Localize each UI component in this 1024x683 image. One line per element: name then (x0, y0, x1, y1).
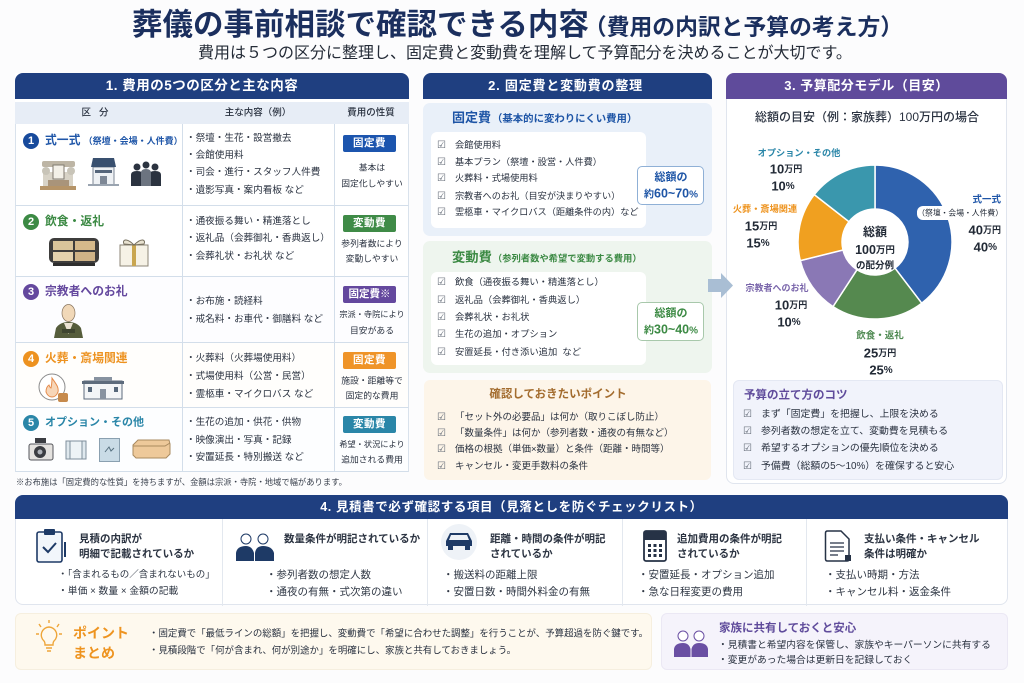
check points list: 価格の根拠（単価×数量）と条件（距離・時間等） (455, 444, 670, 455)
note: 施設・距離等で (341, 376, 403, 386)
label: ceremony set (917, 194, 1003, 254)
badge: 固定費※ (348, 288, 390, 300)
label: religious (745, 282, 809, 330)
variable cost list: 会葬礼状・お礼状 (455, 312, 529, 322)
fixed cost list: 基本プラン（祭壇・設営・人件費） (455, 157, 602, 167)
row 3: religious: ・戒名料・お車代・御膳料 など (186, 314, 323, 325)
variable cost list: ☑ (437, 277, 446, 288)
fixed cost heading: 固定費（基本的に変わりにくい費用） (452, 110, 637, 125)
heading: 数量条件が明記されているか (284, 533, 420, 545)
fixed cost list: ☑ (437, 173, 446, 184)
tips heading: 予算の立て方のコツ (744, 389, 848, 401)
badge (343, 215, 396, 232)
checklist item 3: されているか (490, 548, 553, 560)
row 2: food (15, 206, 409, 277)
label: options: オプション・その他 (758, 147, 840, 158)
chart subtitle: 総額の目安（例：家族葬）100万円の場合 (755, 110, 979, 124)
label: food: 飲食・返礼 (856, 330, 904, 342)
panel: budget model (726, 73, 1007, 484)
variable cost list: ☑ (437, 347, 446, 358)
summary text: ・固定費で「最低ラインの総額」を把握し、変動費で「希望に合わせた調整」を行うことが、予算超過を防ぐ鍵です。 (149, 628, 648, 639)
label: options (758, 147, 840, 194)
list: ・お布施・読経料 (186, 296, 263, 307)
variable cost list (431, 272, 646, 365)
icon: clipboard (36, 529, 66, 563)
row 2: food: 2 (28, 216, 34, 228)
variable cost list: 安置延長・付き添い追加 など (455, 347, 581, 357)
fixed share callout (637, 166, 704, 205)
row 5: options: 5 (28, 417, 34, 429)
title: 葬儀の事前相談で確認できる内容（費用の内訳と予算の考え方） (132, 8, 903, 42)
bullets: ・搬送料の距離上限 (443, 569, 538, 581)
row 1: ceremony set: 固定化しやすい (341, 179, 403, 189)
label: religious: 10万円 (775, 298, 807, 312)
heading: 支払い条件・キャンセル (864, 533, 980, 545)
checklist item 5: 条件は明確か (864, 548, 927, 560)
heading: 見積の内訳が (79, 533, 142, 545)
heading: 追加費用の条件が明記 (677, 533, 782, 545)
fixed cost list: ☑ (437, 157, 446, 168)
fixed cost list: ☑ (437, 207, 446, 218)
row 5: options (15, 408, 409, 472)
icon: light bulb (36, 620, 62, 652)
tips box (733, 380, 1003, 480)
label: options: 10% (771, 178, 795, 194)
badge: 変動費 (353, 217, 386, 229)
row 4: cremation: 火葬・斎場関連 (45, 351, 128, 365)
row 1: ceremony set: ・遺影写真・案内看板 など (186, 185, 304, 196)
check points box (424, 380, 711, 480)
checklist item 1: 明細で記載されているか (79, 548, 194, 560)
icon: calculator (643, 530, 667, 562)
label: cremation (733, 203, 797, 250)
variable cost box (423, 241, 712, 373)
summary heading: ポイント (73, 625, 129, 641)
tips list: まず「固定費」を把握し、上限を決める (761, 409, 939, 420)
donut centre label: の配分例 (856, 260, 894, 272)
icon: hall (88, 158, 119, 186)
row 5: options: オプション・その他 (45, 416, 144, 428)
row 2: food: ・会葬礼状・お礼状 など (186, 251, 294, 262)
check points list: ☑ (437, 444, 446, 455)
badge: 固定費 (353, 137, 386, 149)
table header row: 区 分 (82, 107, 108, 118)
panel: family sharing: ・変更があった場合は更新日を記録しておく (718, 655, 912, 666)
row 2: food: ・返礼品（会葬御礼・香典返し） (186, 233, 330, 244)
heading: 距離・時間の条件が明記 (490, 533, 606, 545)
icon: staff (131, 162, 161, 186)
table header row: 主な内容（例） (225, 107, 291, 118)
fixed cost list: 霊柩車・マイクロバス（距離条件の内）など (455, 207, 639, 217)
note: 宗派・寺院により (339, 310, 405, 319)
label: food: 25% (869, 362, 893, 378)
row 5: options: ・安置延長・特別搬送 など (186, 452, 304, 463)
panel: summary: ・見積段階で「何が含まれ、何が別途か」を明確にし、家族と共有しておきましょう。 (149, 645, 516, 656)
row 5: options: 追加される費用 (341, 455, 403, 465)
label: food: 25万円 (864, 346, 896, 360)
panel heading 1: 1. 費用の5つの区分と主な内容 (106, 78, 298, 93)
label: cremation: 15万円 (745, 218, 777, 234)
panel: summary: まとめ (73, 645, 115, 661)
row 3: religious: 宗教者へのお礼 (45, 284, 128, 298)
panel: estimate checklist (15, 495, 1008, 605)
donut centre label (855, 224, 895, 272)
row 1: ceremony set (15, 124, 409, 206)
variable cost heading: 変動費（参列者数や希望で変動する費用） (452, 249, 642, 264)
checklist item 3: ・安置日数・時間外料金の有無 (443, 586, 590, 598)
bullets: ・支払い時期・方法 (825, 569, 920, 581)
tips list: ☑ (743, 426, 752, 437)
list: ・祭壇・生花・設営撤去 (186, 133, 292, 144)
label: ceremony set: 40万円 (969, 222, 1001, 238)
checklist item 2 (223, 519, 428, 606)
checklist item 4: ・急な日程変更の費用 (638, 586, 743, 598)
checklist item 3 (428, 519, 623, 606)
arrow (708, 273, 733, 298)
checklist item 5 (824, 530, 980, 598)
tips list: ☑ (743, 443, 752, 454)
check points list: ☑ (437, 412, 446, 423)
variable share callout: 約30~40% (644, 322, 698, 336)
check points list: 「数量条件」は何か（参列者数・通夜の有無など） (455, 428, 674, 439)
badge (343, 135, 396, 152)
variable share callout: 総額の (654, 308, 688, 320)
badge: 固定費 (353, 354, 386, 366)
fixed share callout: 総額の (654, 172, 688, 184)
check points list (437, 412, 674, 472)
checklist item 1 (16, 519, 223, 606)
row 2: food: 変動しやすい (346, 254, 398, 264)
check points heading: 確認しておきたいポイント (489, 388, 627, 400)
variable cost list: 返礼品（会葬御礼・香典返し） (455, 295, 585, 305)
tips list: ☑ (743, 409, 752, 420)
badge (343, 286, 396, 303)
panel heading 2: 2. 固定費と変動費の整理 (488, 78, 643, 93)
icon: monk (54, 304, 83, 338)
panel: fixed and variable (423, 73, 712, 480)
tips list: 参列者数の想定を立て、変動費を見積もる (761, 426, 948, 437)
tips list: 予備費（総額の5～10%）を確保すると安心 (761, 461, 954, 472)
row 5: options: ・映像演出・写真・記録 (186, 435, 292, 446)
variable cost list: ☑ (437, 329, 446, 340)
fixed cost list: 火葬料・式場使用料 (455, 173, 538, 183)
footnote: ※お布施は「固定費的な性質」を持ちますが、金額は宗派・寺院・地域で幅があります。 (16, 477, 347, 487)
label: ceremony set: 40% (974, 240, 997, 254)
checklist item 2: ・通夜の有無・式次第の違い (266, 586, 402, 598)
panel heading 3 (726, 73, 1007, 99)
table header row: 費用の性質 (347, 107, 395, 118)
label: cremation: 15% (746, 236, 770, 250)
badge (343, 416, 396, 433)
row 1: ceremony set: 1 (28, 135, 34, 147)
tips list (743, 408, 954, 472)
panel: cost categories (15, 73, 409, 472)
row 4: cremation: ・式場使用料（公営・民営） (186, 371, 311, 382)
fixed cost list (431, 132, 646, 228)
icon: bento (49, 238, 99, 266)
bullets: ・「含まれるもの／含まれないもの」 (58, 569, 215, 580)
bullets: ・安置延長・オプション追加 (638, 569, 774, 581)
row 4: cremation: 4 (28, 353, 34, 365)
checklist item 4: されているか (677, 548, 740, 560)
fixed cost list: ☑ (437, 191, 446, 202)
badge (343, 352, 396, 369)
row 1: ceremony set: 式一式 （祭壇・会場・人件費） (45, 133, 183, 147)
panel heading 4 (15, 495, 1008, 519)
badge: 変動費 (353, 418, 386, 430)
row 1: ceremony set: ・司会・進行・スタッフ人件費 (186, 167, 320, 178)
label: ceremony set: 式一式 (972, 194, 1001, 206)
donut centre label: 100万円 (855, 243, 895, 257)
check points list: ☑ (437, 428, 446, 439)
row 3: religious: 目安がある (350, 326, 394, 336)
icon: flame (38, 374, 68, 402)
bullets: ・参列者数の想定人数 (266, 569, 371, 581)
family heading: 家族に共有しておくと安心 (719, 622, 856, 634)
row 2: food: 飲食・返礼 (45, 214, 104, 228)
icon: people (236, 534, 274, 561)
check points list: ☑ (437, 461, 446, 472)
subtitle: 費用は５つの区分に整理し、固定費と変動費を理解して予算配分を決めることが大切です。 (198, 45, 852, 62)
row 4: cremation: ・霊柩車・マイクロバス など (186, 389, 313, 400)
note: 参列者数により (341, 239, 403, 249)
checklist item 1: ・単価 × 数量 × 金額の記載 (58, 586, 178, 597)
donut centre label: 総額 (863, 224, 887, 239)
row 1: ceremony set: ・会館使用料 (186, 150, 244, 161)
checklist item 5: ・キャンセル料・返金条件 (825, 586, 951, 598)
list: ・生花の追加・供花・供物 (186, 417, 301, 428)
panel heading 1 (15, 73, 409, 99)
fixed share callout: 約60~70% (644, 186, 698, 200)
table header row (15, 102, 409, 124)
icon: gift (120, 240, 148, 266)
fixed cost list: 宗教者へのお礼（目安が決まりやすい） (455, 191, 620, 201)
variable cost list: ☑ (437, 295, 446, 306)
row 4: cremation: 固定的な費用 (346, 391, 398, 401)
donut chart (733, 147, 1003, 378)
icon: crematorium building (82, 377, 124, 400)
row 4: cremation (15, 343, 409, 408)
icon: box (132, 440, 170, 458)
icon: altar (40, 161, 76, 190)
tips list: ☑ (743, 461, 752, 472)
family text: ・見積書と希望内容を保管し、家族やキーパーソンに共有する (718, 640, 991, 651)
list: ・火葬料（火葬場使用料） (186, 353, 301, 364)
variable cost list: 飲食（通夜振る舞い・精進落とし） (455, 277, 604, 287)
icon: car (441, 524, 477, 560)
panel heading 4: 4. 見積書で必ず確認する項目（見落としを防ぐチェックリスト） (320, 500, 703, 514)
icon: family (674, 630, 708, 657)
check points list: 「セット外の必要品」は何か（取りこぼし防止） (455, 412, 664, 423)
label: religious: 10% (777, 314, 801, 330)
label: religious: 宗教者へのお礼 (745, 282, 809, 293)
panel heading 3: 3. 予算配分モデル（目安） (784, 78, 949, 93)
icon: camera (28, 438, 54, 460)
panel heading 2 (423, 73, 712, 99)
row 3: religious (15, 277, 409, 343)
icon: photo (99, 438, 120, 462)
fixed cost box (423, 103, 712, 236)
variable cost list: ☑ (437, 312, 446, 323)
panel: family sharing (661, 613, 1008, 670)
variable cost list: 生花の追加・オプション (455, 329, 557, 339)
note: 希望・状況により (339, 440, 405, 449)
row 3: religious: 3 (28, 286, 34, 298)
label: options: 10万円 (770, 162, 802, 176)
label: food (856, 330, 904, 378)
fixed cost list: 会館使用料 (455, 140, 501, 150)
label: ceremony set: （祭壇・会場・人件費） (917, 208, 1003, 218)
list: ・通夜振る舞い・精進落とし (186, 216, 311, 227)
variable share callout (637, 302, 704, 341)
icon: document (824, 530, 851, 562)
icon: film (66, 440, 86, 460)
panel: summary (15, 613, 652, 670)
check points list: キャンセル・変更手数料の条件 (455, 461, 588, 472)
note: 基本は (359, 163, 385, 173)
tips list: 希望するオプションの優先順位を決める (761, 443, 939, 454)
checklist item 4 (623, 519, 807, 606)
label: cremation: 火葬・斎場関連 (733, 203, 797, 214)
fixed cost list: ☑ (437, 140, 446, 151)
